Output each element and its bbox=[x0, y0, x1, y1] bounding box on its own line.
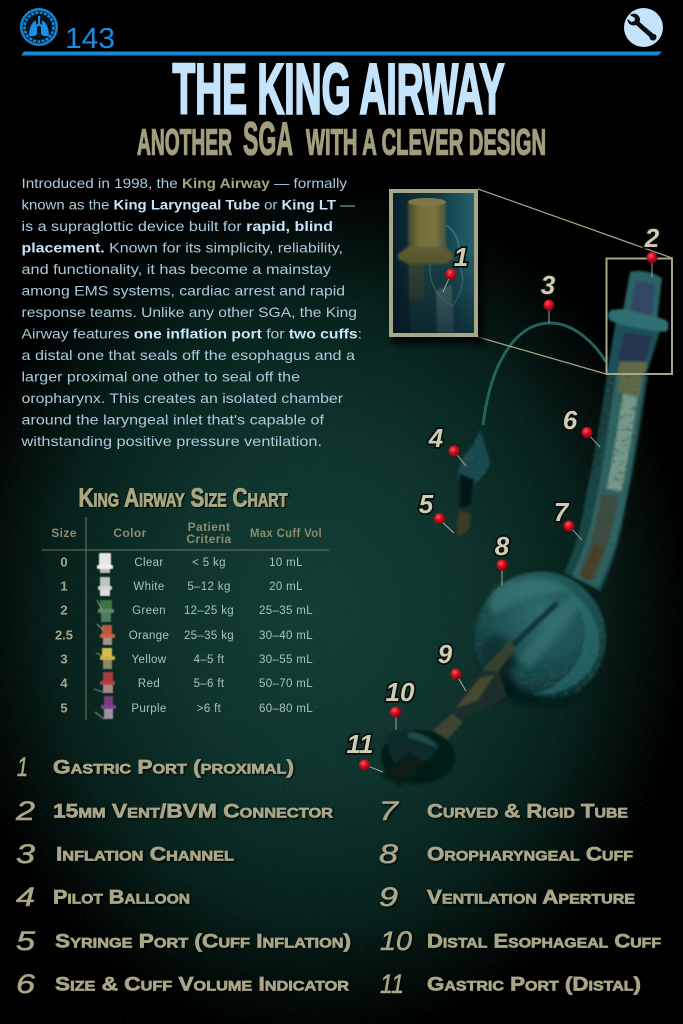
subtitle bbox=[137, 112, 546, 164]
legend item 4: 4 bbox=[16, 882, 35, 912]
chart rows: 1 bbox=[60, 578, 68, 594]
distal esophageal cuff bbox=[381, 730, 455, 786]
chart header row bbox=[51, 520, 322, 546]
pin 1 bbox=[443, 242, 468, 292]
pin 1: 1 bbox=[454, 242, 468, 272]
legend item 4: Pilot Balloon bbox=[53, 886, 190, 908]
header rule bbox=[21, 52, 662, 56]
pilot balloon bbox=[459, 430, 490, 508]
chart header row: Max Cuff Vol bbox=[250, 526, 322, 540]
zoom connector lines bbox=[478, 189, 672, 374]
pin 3 bbox=[541, 270, 556, 323]
legend item 5: 5 bbox=[16, 926, 36, 956]
legend item 7: 7 bbox=[379, 796, 399, 826]
syringe port bbox=[456, 510, 471, 537]
pin 9 bbox=[438, 639, 466, 691]
legend item 1: 1 bbox=[17, 752, 28, 782]
chart rows: 2 bbox=[60, 602, 68, 618]
chart rows: < 5 kg bbox=[192, 557, 226, 569]
pin 3: 3 bbox=[541, 270, 556, 300]
legend item 10: Distal Esophageal Cuff bbox=[427, 930, 661, 952]
intro text block: response teams. Unlike any other SGA, the King bbox=[22, 304, 357, 320]
legend item 1: Gastric Port (proximal) bbox=[53, 756, 294, 778]
size chart bbox=[42, 482, 329, 720]
chart header row: Criteria bbox=[186, 532, 232, 546]
legend item 9: 9 bbox=[379, 882, 398, 912]
chart rows: Red bbox=[138, 678, 160, 690]
chart rows: 0 bbox=[60, 554, 68, 570]
pin 8: 8 bbox=[495, 531, 510, 561]
legend item 10: 10 bbox=[380, 926, 412, 956]
pin 2 bbox=[644, 223, 660, 277]
icon: wrench bbox=[624, 8, 663, 47]
legend item 2: 2 bbox=[15, 796, 35, 826]
pin 6 bbox=[563, 405, 600, 447]
legend item 9 bbox=[379, 882, 635, 912]
chart header row: Color bbox=[113, 526, 147, 540]
intro text block: placement. Known for its simplicity, reliability, bbox=[22, 240, 343, 256]
issue number: 143 bbox=[65, 23, 115, 55]
subtitle: SGA bbox=[243, 112, 293, 164]
pin 5: 5 bbox=[419, 489, 434, 519]
chart rows: 2.5 bbox=[55, 628, 73, 642]
legend item 5: Syringe Port (Cuff Inflation) bbox=[55, 930, 351, 952]
chart rows: 30–40 mL bbox=[259, 630, 313, 642]
pin 6: 6 bbox=[563, 405, 578, 435]
legend item 3: 3 bbox=[16, 839, 35, 869]
chart header row: Size bbox=[51, 526, 77, 540]
chart rows: 30–55 mL bbox=[259, 654, 313, 666]
legend item 5 bbox=[16, 926, 351, 956]
intro text block: known as the King Laryngeal Tube or King LT — bbox=[22, 196, 355, 212]
subtitle: ANOTHER bbox=[137, 121, 232, 162]
intro text block: oropharynx. This creates an isolated chamber bbox=[22, 390, 343, 406]
legend item 11 bbox=[380, 969, 641, 999]
legend item 6: Size & Cuff Volume Indicator bbox=[55, 974, 349, 996]
zoom outline box bbox=[606, 258, 672, 374]
legend item 7 bbox=[379, 796, 628, 826]
inset: gastric port close-up bbox=[391, 191, 484, 344]
chart rows: 25–35 mL bbox=[259, 605, 313, 617]
chart rows: Green bbox=[132, 605, 166, 617]
chart rows: White bbox=[133, 581, 165, 593]
intro text block bbox=[20, 175, 362, 449]
legend item 10 bbox=[380, 926, 661, 956]
intro text block: is a supraglottic device built for rapid, blind bbox=[22, 218, 333, 234]
chart rows: Purple bbox=[131, 703, 167, 715]
legend item 3: Inflation Channel bbox=[56, 844, 235, 866]
chart rows: 5–6 ft bbox=[194, 678, 225, 690]
ventilation aperture and distal tube bbox=[433, 640, 516, 742]
pin 9: 9 bbox=[438, 639, 453, 669]
chart rows: 5–12 kg bbox=[187, 581, 231, 593]
legend item 8: Oropharyngeal Cuff bbox=[427, 844, 634, 866]
pin 4 bbox=[428, 423, 466, 466]
chart rows: 10 mL bbox=[269, 557, 303, 569]
pin 10 bbox=[386, 677, 415, 730]
pin 10: 10 bbox=[386, 677, 415, 707]
chart rows: 4 bbox=[60, 676, 68, 690]
legend item 2: 15mm Vent/BVM Connector bbox=[53, 800, 333, 822]
connector bbox=[607, 271, 668, 373]
intro text block: among EMS systems, cardiac arrest and rapid bbox=[22, 282, 345, 298]
inflation channel bbox=[483, 323, 606, 425]
chart rows: 12–25 kg bbox=[184, 605, 234, 617]
legend item 2 bbox=[15, 796, 333, 826]
chart rows: >6 ft bbox=[197, 703, 222, 715]
legend item 1 bbox=[17, 752, 294, 782]
oropharyngeal cuff bbox=[475, 572, 606, 705]
chart rows: 3 bbox=[60, 652, 68, 666]
illustration: King Airway device bbox=[381, 271, 668, 786]
legend item 8 bbox=[379, 839, 634, 869]
legend item 9: Ventilation Aperture bbox=[427, 886, 635, 908]
pin 11: 11 bbox=[346, 729, 374, 759]
chart rows: 5 bbox=[60, 700, 68, 716]
pin 8 bbox=[495, 531, 510, 585]
intro text block: withstanding positive pressure ventilation. bbox=[20, 433, 322, 449]
connector colour swatches bbox=[94, 553, 116, 719]
pin 7: 7 bbox=[554, 497, 570, 527]
intro text block: and functionality, it has become a mainstay bbox=[22, 261, 331, 277]
legend item 6 bbox=[16, 969, 349, 999]
intro text block: Introduced in 1998, the King Airway — formally bbox=[22, 175, 347, 191]
pin 7 bbox=[554, 497, 582, 540]
legend item 11: Gastric Port (Distal) bbox=[427, 974, 641, 996]
chart rows: Yellow bbox=[132, 654, 167, 666]
chart rows: 60–80 mL bbox=[259, 703, 313, 715]
chart rows: 50–70 mL bbox=[259, 678, 313, 690]
legend item 7: Curved & Rigid Tube bbox=[427, 800, 628, 822]
legend bbox=[15, 752, 661, 999]
legend item 4 bbox=[16, 882, 190, 912]
chart rows: 25–35 kg bbox=[184, 630, 234, 642]
legend item 8: 8 bbox=[379, 839, 398, 869]
main tube bbox=[582, 364, 634, 582]
chart rows bbox=[55, 554, 313, 716]
intro text block: Airway features one inflation port for two cuffs : bbox=[22, 326, 362, 342]
legend item 3 bbox=[16, 839, 235, 869]
chart rows: 20 mL bbox=[269, 581, 303, 593]
pin 2: 2 bbox=[644, 223, 660, 253]
chart rows: Orange bbox=[129, 630, 169, 642]
chart header row: Patient bbox=[188, 520, 230, 534]
pin 5 bbox=[419, 489, 454, 533]
chart title: King Airway Size Chart bbox=[78, 482, 288, 512]
legend item 11: 11 bbox=[380, 969, 404, 999]
intro text block: a distal one that seals off the esophagus and a bbox=[22, 347, 355, 363]
logo: lungs badge bbox=[20, 8, 58, 46]
chart rows: 4–5 ft bbox=[194, 654, 225, 666]
callout pins bbox=[346, 223, 660, 772]
pin 4: 4 bbox=[428, 423, 444, 453]
intro text block: larger proximal one other to seal off the bbox=[22, 368, 300, 384]
intro text block: around the laryngeal inlet that's capable of bbox=[22, 412, 324, 428]
legend item 6: 6 bbox=[16, 969, 36, 999]
chart rows: Clear bbox=[134, 557, 164, 569]
pin 11 bbox=[346, 729, 383, 772]
